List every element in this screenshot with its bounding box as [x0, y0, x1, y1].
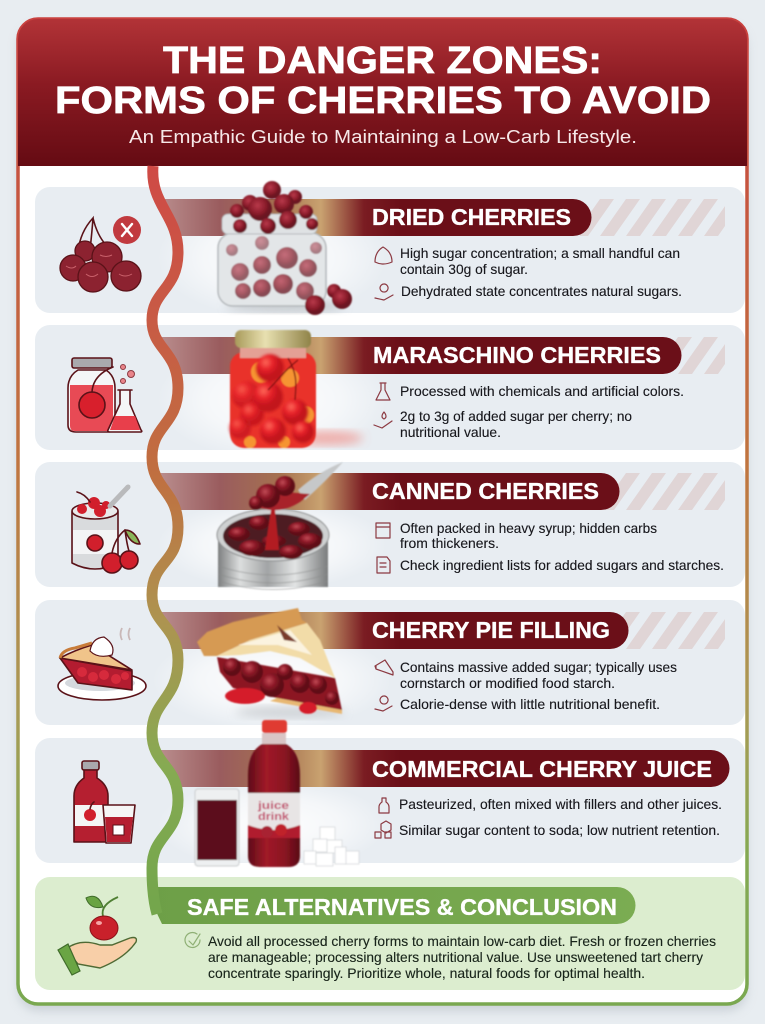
panel: cherry pie filling background — [35, 600, 745, 725]
text: juice facts — [399, 796, 722, 838]
heading: cherry pie filling: CHERRY PIE FILLING — [372, 617, 610, 643]
panel: maraschino cherries background — [35, 325, 745, 450]
image glows — [152, 198, 392, 870]
illustration: can with spoon of cherries — [217, 462, 343, 590]
text: pie filling facts: cornstarch or modified food starch. — [400, 675, 615, 691]
panel: canned cherries background — [35, 462, 745, 587]
small bullet icons — [185, 247, 393, 948]
bullet icon: check — [185, 933, 200, 948]
illustration: jar of dried cherries — [218, 181, 352, 315]
ribbon: cherry pie filling — [158, 612, 628, 649]
text: conclusion: concentrate sparingly. Prioritize whole, natural foods for optimal health. — [208, 965, 645, 981]
text: maraschino facts: nutritional value. — [400, 424, 501, 440]
ribbon: safe alternatives — [150, 887, 636, 924]
text: maraschino facts: Processed with chemicals and artificial colors. — [400, 383, 684, 399]
text: pie filling facts: Contains massive added sugar; typically uses — [400, 659, 677, 675]
text: conclusion — [208, 933, 716, 981]
text: pie filling facts: Calorie-dense with little nutritional benefit. — [400, 696, 660, 712]
bullet icon: hand with coin — [375, 696, 392, 711]
icon: pie slice on plate — [58, 628, 146, 700]
icon: can with cherries — [72, 487, 140, 573]
bullet icon: sugar bag — [375, 247, 392, 264]
sugar cubes — [304, 827, 359, 866]
bullet icon: hand with drop — [374, 412, 392, 428]
heading: canned cherries: CANNED CHERRIES — [372, 478, 599, 504]
icon: juice bottle and glass — [74, 761, 135, 843]
wavy timeline — [152, 166, 178, 914]
heading: safe alternatives: SAFE ALTERNATIVES & CONCLUSION — [187, 894, 617, 920]
ribbon stripes — [580, 199, 725, 649]
ribbon: maraschino cherries — [158, 337, 682, 374]
text: canned facts: Often packed in heavy syrup; hidden carbs — [400, 520, 657, 536]
ribbon: commercial cherry juice — [158, 750, 730, 787]
title — [55, 40, 711, 122]
header banner — [18, 19, 747, 166]
illustration: maraschino jar — [229, 330, 363, 448]
text: pie filling facts — [400, 659, 677, 712]
bottle — [248, 720, 300, 867]
bullet icon: flask — [376, 383, 390, 400]
text: dried cherries facts: High sugar concentration; a small handful can — [400, 245, 680, 261]
panel: safe alternatives background — [35, 877, 745, 990]
heading: maraschino cherries: MARASCHINO CHERRIES — [373, 342, 661, 368]
bullet icon: hand with coin — [375, 284, 393, 300]
bottle: drink — [258, 811, 290, 823]
bottle: juice — [257, 800, 289, 812]
text: maraschino facts: 2g to 3g of added sugar per cherry; no — [400, 408, 632, 424]
text: dried cherries facts: Dehydrated state concentrates natural sugars. — [401, 283, 682, 299]
heading: commercial cherry juice: COMMERCIAL CHERRY JUICE — [372, 756, 712, 782]
ribbon: dried cherries — [158, 199, 592, 236]
text: juice facts: Similar sugar content to soda; low nutrient retention. — [399, 822, 720, 838]
bullet icon: checklist — [377, 557, 390, 573]
text: conclusion: are manageable; processing alters nutritional value. Use unsweetened tart cherry — [208, 949, 703, 965]
glass — [195, 789, 239, 866]
illustration: pie slice — [197, 608, 345, 718]
bullet icon: jar — [376, 523, 390, 538]
text: dried cherries facts — [400, 245, 682, 299]
text: maraschino facts — [400, 383, 684, 440]
panel: dried cherries background — [35, 187, 745, 313]
text: canned facts — [400, 520, 724, 573]
icon: hand holding cherry — [58, 896, 136, 975]
ribbon: canned cherries — [158, 473, 620, 510]
panel: commercial cherry juice background — [35, 738, 745, 863]
text: conclusion: Avoid all processed cherry forms to maintain low-carb diet. Fresh or frozen cherries — [208, 933, 716, 949]
bullet icon: cubes — [375, 821, 391, 838]
bullet icon: pie slice — [375, 660, 393, 675]
icon: maraschino jar and flask — [68, 358, 142, 432]
text: canned facts: Check ingredient lists for added sugars and starches. — [400, 557, 724, 573]
illustration: juice bottle, glass and sugar cubes — [195, 720, 359, 867]
heading: dried cherries: DRIED CHERRIES — [372, 204, 571, 230]
subtitle: An Empathic Guide to Maintaining a Low-Carb Lifestyle. — [129, 127, 637, 147]
text: juice facts: Pasteurized, often mixed with fillers and other juices. — [399, 796, 722, 812]
text: canned facts: from thickeners. — [400, 535, 499, 551]
title: FORMS OF CHERRIES TO AVOID — [55, 80, 711, 122]
title: THE DANGER ZONES: — [163, 40, 602, 82]
icon: dried cherry cluster with x badge — [60, 216, 141, 292]
text: dried cherries facts: contain 30g of sugar. — [400, 261, 528, 277]
bullet icon: bottle — [379, 798, 389, 813]
